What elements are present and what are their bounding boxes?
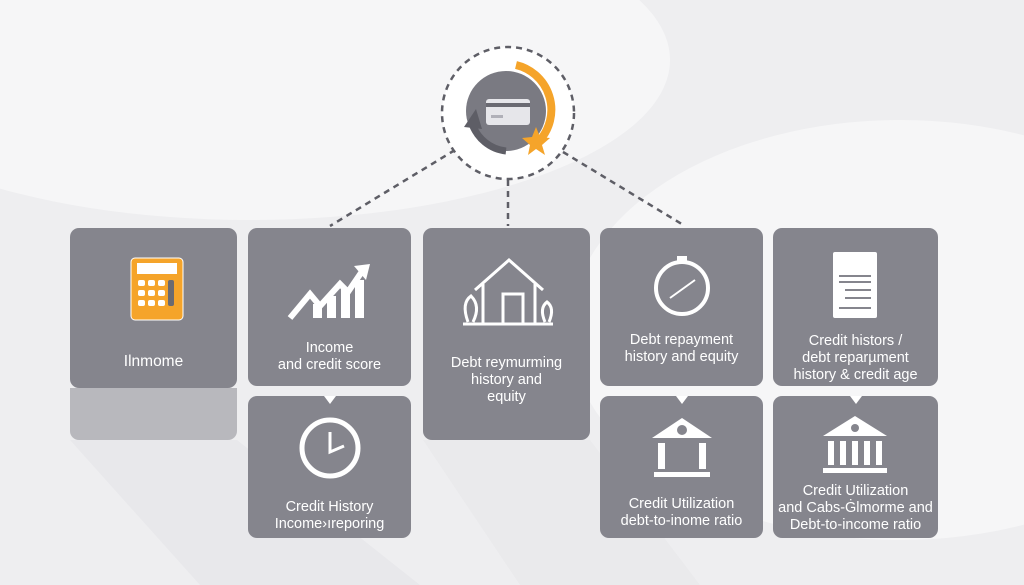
- label: Debt reymurming: [451, 355, 562, 371]
- label: history & credit age: [793, 367, 918, 383]
- panel: debt repayment: [600, 228, 763, 386]
- label: Credit Utilization: [803, 483, 908, 499]
- label: Credit histors /: [809, 333, 902, 349]
- central icon: card cycle: [440, 46, 576, 180]
- panel: income and credit score: [248, 228, 411, 386]
- label: equity: [487, 389, 526, 405]
- label: Debt repayment: [630, 332, 733, 348]
- label: [451, 355, 562, 405]
- label: [793, 333, 918, 383]
- panel: income: [70, 228, 237, 388]
- label: and Cabs-Ġlmorme and: [778, 500, 933, 516]
- icon: clock: [300, 396, 360, 478]
- label: Credit Utilization: [629, 496, 734, 512]
- label: Income: [306, 340, 353, 356]
- panel shadow: [70, 388, 237, 440]
- label: debt reparµment: [802, 350, 909, 366]
- panel: credit utilization and debt-to-income: [773, 396, 938, 538]
- label: Income›ıreporing: [275, 516, 384, 532]
- label: Credit History: [286, 499, 373, 515]
- label: debt-to-inome ratio: [621, 513, 742, 529]
- icon: stopwatch: [654, 256, 710, 316]
- icon: bank columns: [823, 396, 887, 473]
- icon: bank: [652, 396, 712, 477]
- label: [278, 340, 381, 373]
- icon: house: [463, 258, 554, 326]
- icon: document: [833, 252, 877, 318]
- label: history and: [471, 372, 542, 388]
- icon: chart: [288, 264, 370, 320]
- label: Debt-to-income ratio: [790, 517, 921, 533]
- icon: calculator: [130, 258, 184, 320]
- label: [778, 483, 933, 533]
- panel: credit utilization: [600, 396, 763, 538]
- label: and credit score: [278, 357, 381, 373]
- panel: credit history: [248, 396, 411, 538]
- label: [621, 496, 742, 529]
- label: Ilnmome: [124, 353, 183, 370]
- label: [275, 499, 384, 532]
- label: [625, 332, 738, 365]
- panel: debt reymurming: [423, 228, 590, 440]
- label: history and equity: [625, 349, 738, 365]
- panel: credit history / credit age: [773, 228, 938, 386]
